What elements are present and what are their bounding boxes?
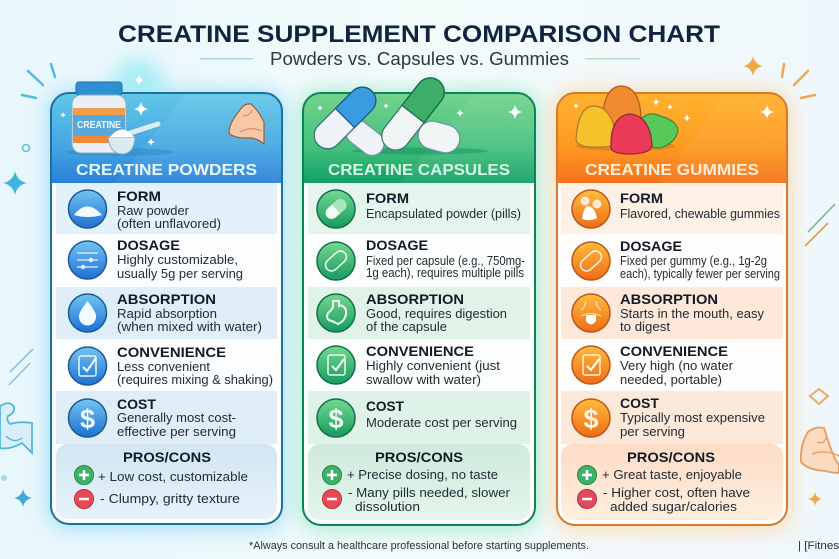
icon: flexed bicep bbox=[229, 104, 264, 144]
row: pros and cons: + Great taste, enjoyable bbox=[602, 468, 742, 482]
row: dosage: DOSAGE bbox=[117, 237, 180, 253]
row: cost: COST bbox=[117, 396, 156, 412]
row: pros and cons: added sugar/calories bbox=[610, 500, 737, 514]
row: absorption bbox=[572, 291, 765, 334]
row: convenience bbox=[68, 344, 273, 387]
row: pros and cons: PROS/CONS bbox=[627, 449, 715, 465]
row: form: Raw powder bbox=[117, 204, 189, 218]
row: convenience: Highly convenient (just bbox=[366, 359, 501, 373]
row: convenience: Very high (no water bbox=[620, 359, 733, 373]
row: dosage bbox=[317, 237, 525, 280]
decorative right accents bbox=[743, 56, 835, 506]
illustration: capsules bbox=[309, 72, 522, 160]
row: convenience bbox=[317, 343, 501, 387]
row: form: FORM bbox=[366, 190, 409, 206]
row: cost bbox=[317, 398, 517, 437]
heading: creatine capsules: CREATINE CAPSULES bbox=[328, 162, 510, 179]
row: pros and cons: - Many pills needed, slower bbox=[348, 486, 510, 500]
row: convenience bbox=[572, 343, 733, 387]
row: cost: Typically most expensive bbox=[620, 411, 765, 425]
row: convenience: CONVENIENCE bbox=[117, 344, 226, 360]
row: dosage: DOSAGE bbox=[620, 238, 682, 254]
icon: right flexed arm bbox=[801, 428, 839, 473]
row: pros and cons bbox=[74, 449, 248, 508]
row: pros and cons bbox=[578, 449, 750, 514]
row: cost: COST bbox=[366, 398, 404, 414]
row: dosage: 1g each), requires multiple pills bbox=[366, 266, 524, 280]
row: form bbox=[572, 190, 780, 228]
row: form: FORM bbox=[117, 188, 161, 204]
row: form: (often unflavored) bbox=[117, 217, 221, 231]
row: pros and cons: - Higher cost, often have bbox=[603, 486, 750, 500]
row: cost: $ bbox=[80, 404, 95, 434]
row: form: Flavored, chewable gummies bbox=[620, 207, 780, 221]
panel: creatine gummies bbox=[557, 86, 787, 525]
row: pros and cons bbox=[322, 449, 510, 514]
footer disclaimer: *Always consult a healthcare professional before starting supplements. bbox=[249, 540, 589, 552]
decorative left accents bbox=[1, 64, 55, 507]
row: pros and cons: PROS/CONS bbox=[375, 449, 463, 465]
row: absorption: Good, requires digestion bbox=[366, 307, 507, 321]
row: convenience: CONVENIENCE bbox=[620, 343, 728, 359]
row: absorption: (when mixed with water) bbox=[117, 320, 262, 334]
icon: left flexed arm bbox=[0, 403, 32, 453]
row: convenience: needed, portable) bbox=[620, 373, 722, 387]
heading: creatine gummies: CREATINE GUMMIES bbox=[585, 162, 759, 179]
row: absorption: to digest bbox=[620, 320, 671, 334]
panel: creatine capsules bbox=[303, 72, 535, 525]
row: cost: effective per serving bbox=[117, 425, 236, 439]
row: convenience: swallow with water) bbox=[366, 373, 481, 387]
row: absorption: ABSORPTION bbox=[117, 291, 216, 307]
illustration: creatine jar and scoop bbox=[60, 75, 174, 156]
row: dosage bbox=[572, 238, 780, 281]
row: cost: $ bbox=[583, 404, 599, 434]
row: pros and cons: + Precise dosing, no taste bbox=[347, 468, 498, 482]
row: dosage: each), typically fewer per serving bbox=[620, 267, 780, 281]
row: cost: per serving bbox=[620, 425, 685, 439]
row: pros and cons: PROS/CONS bbox=[123, 449, 211, 465]
row: convenience: CONVENIENCE bbox=[366, 343, 474, 359]
row: dosage: Fixed per gummy (e.g., 1g-2g bbox=[620, 254, 767, 268]
row: absorption bbox=[68, 291, 262, 334]
row: pros and cons: - Clumpy, gritty texture bbox=[100, 492, 240, 506]
row: convenience: (requires mixing & shaking) bbox=[117, 373, 273, 387]
row: pros and cons: + Low cost, customizable bbox=[98, 470, 248, 484]
illustration: gummies bbox=[573, 86, 774, 154]
row: cost bbox=[68, 396, 236, 439]
row: pros and cons: dissolution bbox=[355, 500, 420, 514]
heading: creatine powders: CREATINE POWDERS bbox=[76, 162, 257, 179]
row: absorption: ABSORPTION bbox=[620, 291, 718, 307]
row: absorption: Starts in the mouth, easy bbox=[620, 307, 765, 321]
row: dosage: DOSAGE bbox=[366, 237, 428, 253]
row: form bbox=[317, 190, 521, 228]
row: form bbox=[68, 188, 221, 231]
row: dosage: Fixed per capsule (e.g., 750mg- bbox=[366, 254, 525, 268]
subtitle: Powders vs. Capsules vs. Gummies bbox=[270, 49, 569, 69]
row: form: FORM bbox=[620, 190, 663, 206]
row: convenience: Less convenient bbox=[117, 360, 211, 374]
illustration: creatine jar and scoop: CREATINE bbox=[77, 120, 121, 131]
row: cost: Moderate cost per serving bbox=[366, 416, 517, 430]
row: cost: COST bbox=[620, 395, 659, 411]
row: dosage: Highly customizable, bbox=[117, 253, 238, 267]
row: dosage: usually 5g per serving bbox=[117, 267, 243, 281]
row: form: Encapsulated powder (pills) bbox=[366, 207, 521, 221]
row: cost: $ bbox=[328, 404, 344, 434]
row: dosage bbox=[68, 237, 243, 281]
panel: creatine powders bbox=[51, 75, 282, 524]
row: absorption: of the capsule bbox=[366, 320, 447, 334]
row: cost bbox=[572, 395, 765, 439]
row: absorption: ABSORPTION bbox=[366, 291, 464, 307]
title: CREATINE SUPPLEMENT COMPARISON CHART bbox=[118, 21, 720, 48]
row: cost: Generally most cost- bbox=[117, 411, 236, 425]
row: absorption bbox=[317, 291, 507, 334]
row: absorption: Rapid absorption bbox=[117, 307, 217, 321]
